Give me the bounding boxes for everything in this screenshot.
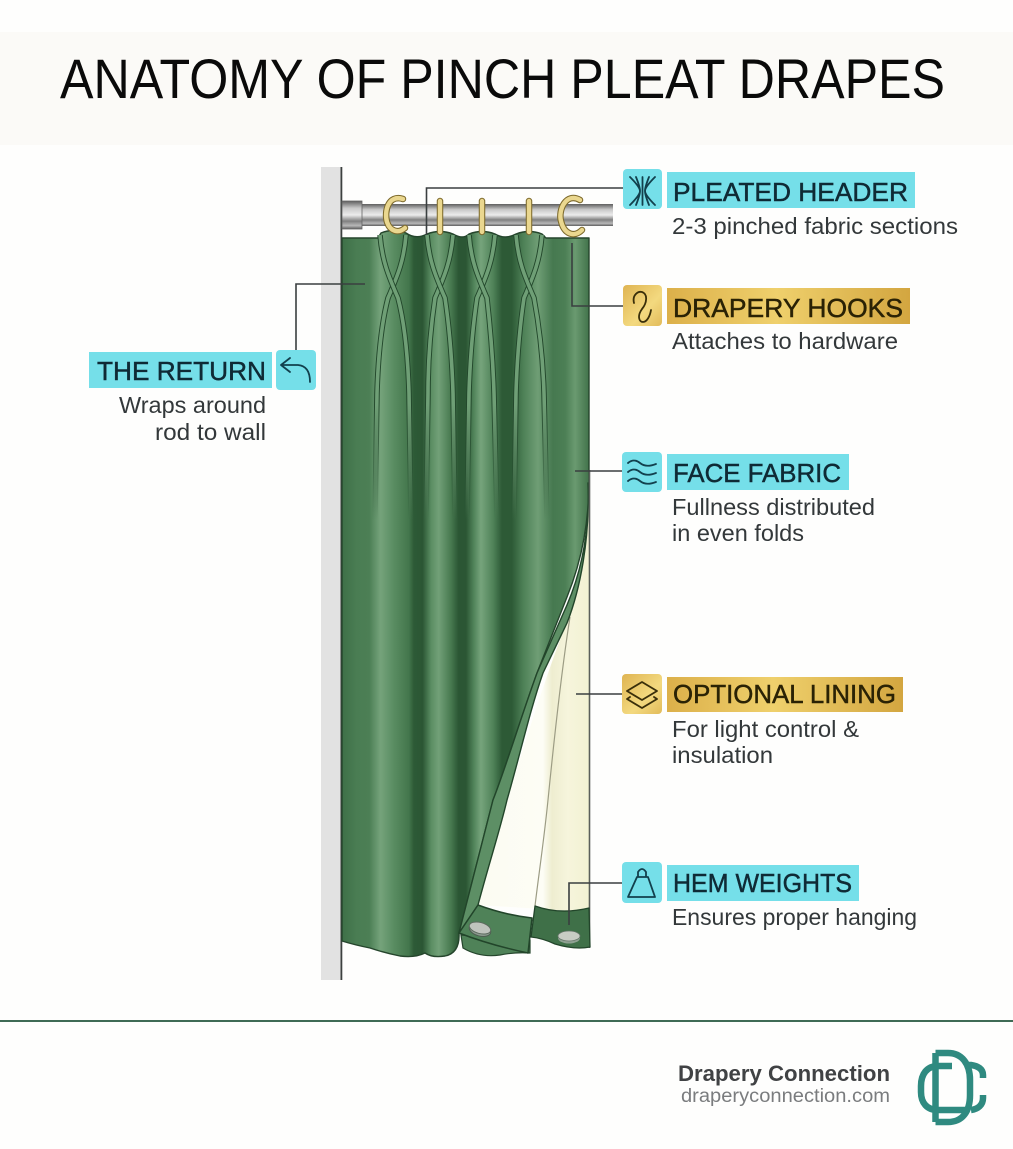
footer brand text: Drapery Connection [678,1061,890,1086]
callout: face fabric: FACE FABRIC [673,458,841,488]
callout: pleated header: 2-3 pinched fabric sections [672,213,958,239]
hem band: back [531,906,590,948]
callout: optional lining: For light control & [672,716,859,742]
callout: face fabric [622,452,875,546]
footer divider [0,1020,1013,1022]
title band [0,32,1013,145]
callout: hem weights: Ensures proper hanging [672,904,917,930]
callout: pleated header: PLEATED HEADER [673,177,908,207]
callout: optional lining: OPTIONAL LINING [673,679,896,709]
icon: return arrow [276,350,316,390]
leader lines [296,188,623,925]
curtain rod with bracket [342,201,613,229]
right curtain edge line [588,470,590,948]
icon: hook [623,285,662,326]
footer brand text [678,1061,890,1107]
callout: the return: Wraps around [119,392,266,418]
callout: the return: THE RETURN [97,356,266,386]
folded-back edge strip [459,483,588,933]
icon: weight [622,862,662,903]
callout: the return: rod to wall [155,419,266,445]
pleat 1 [375,235,411,520]
hem weight: flap [468,920,492,939]
ring highlights [386,198,582,234]
callout: hem weights: HEM WEIGHTS [673,868,852,898]
hem weight: back [558,931,580,944]
hem band: flap [459,905,532,953]
lining (cream underside) [478,500,589,912]
callout: drapery hooks: Attaches to hardware [672,328,898,354]
pleat 2 [426,235,455,520]
lower curtain lobe behind flap [461,935,530,956]
callout: face fabric: in even folds [672,520,804,546]
pleat 4 [514,235,547,520]
curtain face fabric [342,230,589,957]
callout: pleated header [623,169,958,239]
pleat 3 [467,235,497,520]
callout: drapery hooks: DRAPERY HOOKS [673,293,903,323]
wall [321,167,342,980]
icon: layers [622,674,662,714]
icon: waves [622,452,662,492]
curtain rings [386,198,582,234]
callout: optional lining: insulation [672,742,773,768]
logo [921,1053,983,1122]
callout: the return [89,350,316,445]
callout: drapery hooks [623,285,910,354]
footer brand text: draperyconnection.com [681,1086,890,1107]
icon: pleats [623,169,662,209]
callout: optional lining [622,674,903,768]
callout: face fabric: Fullness distributed [672,494,875,520]
callout: hem weights [622,862,917,930]
